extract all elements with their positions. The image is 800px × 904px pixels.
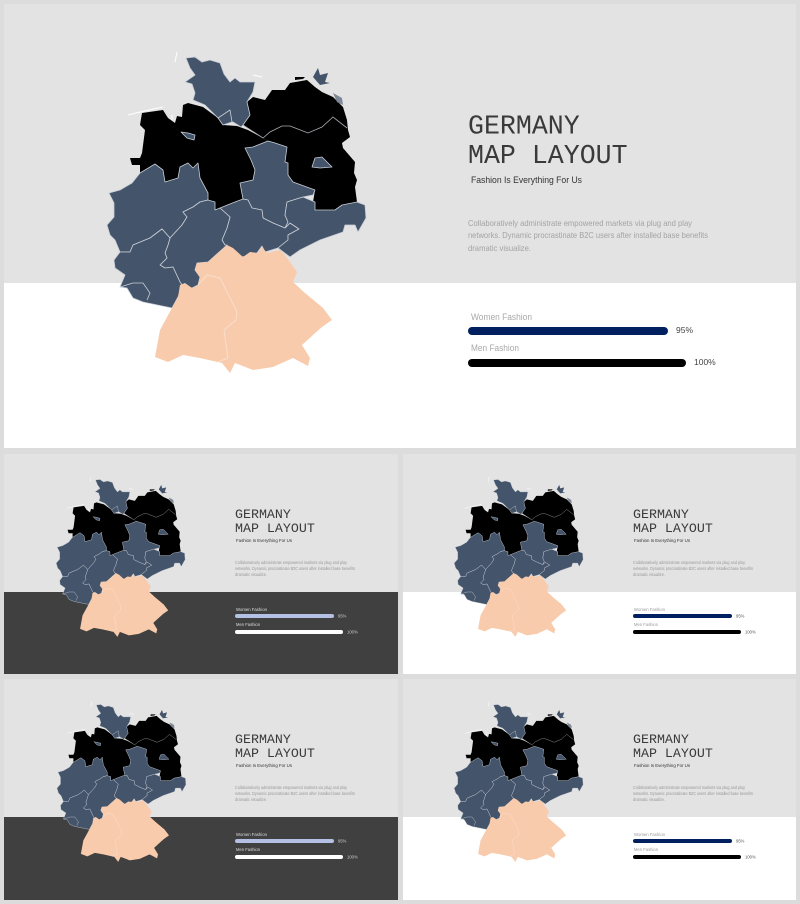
body text: Collaboratively administrate empowered markets via plug and play	[468, 218, 693, 228]
title: GERMANY	[235, 507, 291, 522]
body text	[468, 218, 708, 253]
bar: men fashion	[633, 622, 756, 634]
bar: men fashion	[633, 847, 756, 860]
bar: men fashion	[235, 622, 358, 634]
body text: Collaboratively administrate empowered markets via plug and play	[633, 785, 746, 790]
body text: dramatic visualize.	[468, 243, 531, 253]
title: GERMANY	[633, 732, 689, 747]
coastal islands	[128, 52, 262, 120]
body text	[633, 785, 753, 802]
map thumbnail	[57, 702, 186, 862]
region: Saxony	[278, 197, 366, 257]
region: Mecklenburg and Brandenburg	[243, 80, 357, 210]
map thumbnail	[454, 477, 583, 637]
title: GERMANY	[468, 112, 580, 142]
body text: networks. Dynamic procrastinate B2C users after installed base benefits	[235, 566, 355, 571]
body text	[235, 560, 355, 577]
map thumbnail	[56, 477, 185, 637]
border: Saarland	[120, 283, 150, 300]
panel: light thumbnail bottom right	[403, 679, 796, 900]
region: Lower Saxony	[130, 103, 268, 210]
bar: women fashion: 95%	[338, 838, 347, 844]
bar: women fashion: Women Fashion	[634, 607, 665, 612]
bar: men fashion: Men Fashion	[236, 847, 260, 852]
subtitle: Fashion Is Everything For Us	[634, 538, 691, 544]
body text: dramatic visualize.	[633, 572, 665, 577]
region: Saxony-Anhalt	[240, 141, 315, 228]
panel: main slide	[4, 4, 796, 448]
title: MAP LAYOUT	[633, 746, 713, 761]
region: North Rhine-Westphalia	[107, 163, 208, 252]
map of Germany	[107, 52, 366, 373]
title	[633, 507, 713, 536]
panel: light thumbnail top right	[403, 454, 796, 674]
bar: women fashion: 95%	[736, 838, 745, 844]
body text: networks. Dynamic procrastinate B2C users after installed base benefits	[468, 230, 708, 240]
bar: women fashion	[235, 832, 347, 844]
bar: women fashion: 95%	[676, 325, 693, 335]
map thumbnail	[454, 702, 583, 862]
title: GERMANY	[235, 732, 291, 747]
subtitle: Fashion Is Everything For Us	[236, 538, 293, 544]
title: MAP LAYOUT	[633, 521, 713, 536]
region: Bavaria and Baden-Wurttemberg	[155, 245, 332, 373]
bar: women fashion: Women Fashion	[236, 607, 267, 612]
body text: Collaboratively administrate empowered markets via plug and play	[633, 560, 746, 565]
bar: men fashion: Men Fashion	[634, 622, 658, 627]
bar: men fashion: Men Fashion	[236, 622, 260, 627]
title	[235, 507, 315, 536]
bar: men fashion: Men Fashion	[471, 343, 519, 353]
bar: women fashion	[633, 607, 745, 618]
panel: dark thumbnail top left	[4, 454, 398, 674]
region: Rhineland-Palatinate	[114, 229, 183, 308]
title: MAP LAYOUT	[235, 746, 315, 761]
body text: networks. Dynamic procrastinate B2C users after installed base benefits	[633, 566, 753, 571]
region: Hesse	[160, 200, 230, 288]
body text: Collaboratively administrate empowered markets via plug and play	[235, 785, 348, 790]
bar: women fashion: Women Fashion	[634, 832, 665, 837]
bar: men fashion: 100%	[745, 854, 756, 860]
region: Schleswig-Holstein	[185, 57, 255, 127]
title	[633, 732, 713, 761]
body text: dramatic visualize.	[633, 797, 665, 802]
title: GERMANY	[633, 507, 689, 522]
bar: men fashion: Men Fashion	[634, 847, 658, 852]
bar: men fashion	[235, 847, 358, 860]
region: Usedom coast	[333, 93, 343, 105]
bar: men fashion: 100%	[347, 854, 358, 860]
region: Rugen island	[313, 68, 330, 85]
title: MAP LAYOUT	[468, 141, 628, 171]
bar: women fashion: 95%	[736, 614, 745, 618]
body text: dramatic visualize.	[235, 572, 267, 577]
bar: men fashion: 100%	[745, 630, 756, 634]
subtitle: Fashion Is Everything For Us	[471, 175, 582, 186]
panel: dark thumbnail bottom left	[4, 679, 398, 900]
region: Bremen	[181, 132, 195, 140]
subtitle: Fashion Is Everything For Us	[634, 763, 691, 769]
bar: women fashion: Women Fashion	[236, 832, 267, 837]
body text: networks. Dynamic procrastinate B2C users after installed base benefits	[633, 791, 753, 796]
body text: networks. Dynamic procrastinate B2C users after installed base benefits	[235, 791, 355, 796]
body text: Collaboratively administrate empowered markets via plug and play	[235, 560, 348, 565]
region: Berlin	[312, 157, 332, 168]
title	[468, 112, 628, 171]
bar: men fashion: 100%	[347, 630, 358, 634]
region: Hamburg	[218, 110, 232, 125]
region: Thuringia	[220, 199, 299, 257]
bar: men fashion: 100%	[694, 357, 716, 367]
border: Bavaria and Baden-Wurttemberg	[198, 275, 237, 362]
bar: women fashion	[468, 312, 693, 335]
bar: women fashion	[633, 832, 745, 844]
body text	[235, 785, 355, 802]
bar: women fashion: Women Fashion	[471, 312, 532, 322]
body text: dramatic visualize.	[235, 797, 267, 802]
title: MAP LAYOUT	[235, 521, 315, 536]
border: Mecklenburg and Brandenburg	[243, 117, 347, 138]
small black island	[295, 77, 305, 80]
bar: women fashion: 95%	[338, 614, 347, 618]
subtitle: Fashion Is Everything For Us	[236, 763, 293, 769]
bar: men fashion	[468, 343, 716, 367]
title	[235, 732, 315, 761]
body text	[633, 560, 753, 577]
bar: women fashion	[235, 607, 347, 618]
